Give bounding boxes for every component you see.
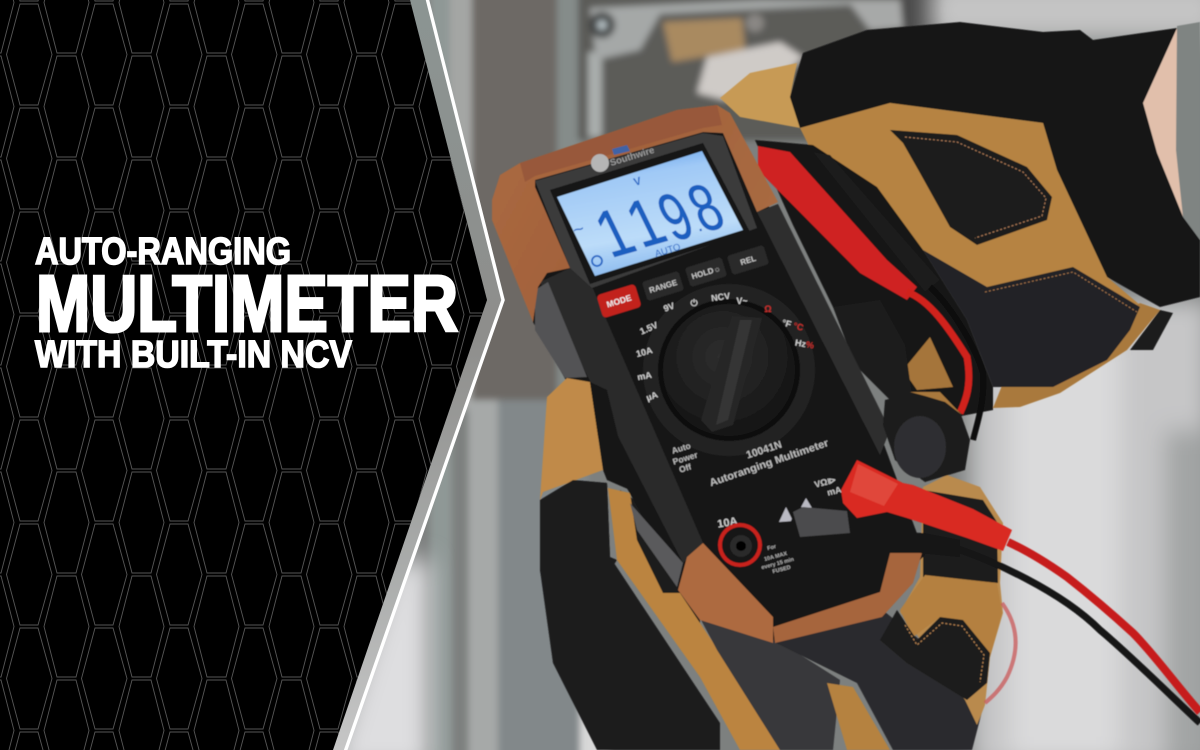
lower hand: dark knuckle band [923,490,998,583]
upper hand: dark area behind meter [755,140,993,420]
auto power off label: Power [671,449,699,467]
LCD screen [557,151,743,276]
LCD digit 1: 1 [583,194,646,272]
dial labels: °F °C [781,317,805,333]
button: REL: REL [739,254,757,267]
translucent band beside chevron [328,0,505,750]
lower hand: tan finger panel [900,575,1002,657]
LCD auto power-off icon [592,256,602,266]
fused note: For [767,544,778,552]
red test lead [841,460,1200,712]
headline line: WITH BUILT-IN NCV: WITH BUILT-IN NCV [35,334,353,376]
lower hand: textured palm [700,618,840,750]
lower hand: right tan finger [900,475,1003,725]
finger pad behind meter [833,300,913,403]
lower hand: tan palm patch [827,683,890,750]
button: MODE [596,284,642,318]
faint red wire behind glove [985,603,1016,703]
dial labels: V~ [736,296,748,306]
upper hand: tan finger between leads [903,337,953,390]
white chevron line [345,0,503,750]
dial labels [635,291,815,403]
input jack 10A [716,515,762,567]
photo: technician testing a multimeter [330,0,1200,750]
black chevron panel [0,0,487,750]
meter side grip [540,268,703,563]
brand logo: Southwire [609,145,656,169]
upper black test lead [813,152,983,440]
bottom rubber bumper [678,543,922,643]
LCD digit 9: 9 [646,178,705,255]
LCD digit 1 second: 1 [614,184,677,262]
auto power off label [670,441,699,475]
dial labels: Ω [764,304,772,314]
LCD AC symbol: ~ [570,218,587,242]
upper hand: thumb tan patch [720,63,800,128]
LCD volts indicator: V [632,175,644,189]
fused note: every 15 min [761,557,795,571]
auto power off label: Off [678,462,693,475]
warning triangles [779,498,812,522]
button: MODE: MODE [605,292,633,310]
meter body [533,132,925,640]
lower hand: textured finger [770,612,985,750]
upper hand: dark cuff lump [1130,310,1173,350]
input jack 10A: 10A [716,515,739,531]
voltage input label: mA [826,484,843,498]
black test lead [787,507,1200,723]
dial labels: ⏻ [690,298,698,308]
fingertip resting on meter [883,390,970,482]
upper red test lead [758,146,969,413]
multimeter [492,105,925,643]
button: HOLD: HOLD☼ [690,264,722,281]
upper hand: lower textured pad [923,250,1140,387]
upper hand: black glove back [790,22,1200,307]
thumb: black knit below tip [540,480,617,640]
dial labels: Hz% [794,337,815,351]
fused note: FUSED [772,565,792,575]
button: REL [727,245,769,275]
thumb: black side strip [590,382,630,490]
fused note: 10A MAX [764,551,788,563]
lower hand: black glove [540,480,720,750]
upper hand: tan cuff edge [993,303,1160,408]
headline [35,231,458,376]
brand logo [591,145,656,172]
dial labels: mA [636,370,653,382]
thumb: tan tip [540,378,603,500]
button: RANGE [642,271,684,301]
model label: Autoranging Multimeter [708,437,830,489]
LCD digit 8: 8 [676,169,735,246]
LCD bezel [535,133,757,288]
voltage input label: VΩ⧐ [813,475,837,490]
LCD auto indicator: AUTO [654,242,682,260]
LCD decimal point: . [696,218,704,234]
lower hand: shadow behind meter edge [620,490,700,640]
meter silver side edge [630,503,683,587]
meter right edge strip [757,204,890,455]
button: HOLD [685,257,727,287]
rotary dial [643,284,815,456]
headline line: AUTO-RANGING: AUTO-RANGING [35,231,291,273]
lower hand: tan strip [608,488,780,750]
top rubber bumper [492,105,778,322]
dial labels: NCV [710,291,731,303]
hexagon pattern on panel [0,0,487,750]
fused note [761,544,795,575]
lower hand: stitched fingertip pad [880,610,990,700]
model label: 10041N [745,439,783,462]
upper hand: stitched palm pad [890,130,1052,245]
button: RANGE: RANGE [648,278,679,295]
auto power off label: Auto [670,441,692,456]
dial labels: 9V [662,301,676,314]
upper hand: tan palm [800,103,1140,305]
dial labels: µA [645,389,660,403]
voltage input label [813,475,843,498]
photo background: blurred metal panels [330,0,1200,750]
meter textured side panel [535,282,587,378]
headline line: MULTIMETER: MULTIMETER [36,259,458,348]
upper hand: sleeve and skin [1143,22,1200,240]
dial labels: 1.5V [638,320,659,337]
dial labels: 10A [635,345,654,359]
